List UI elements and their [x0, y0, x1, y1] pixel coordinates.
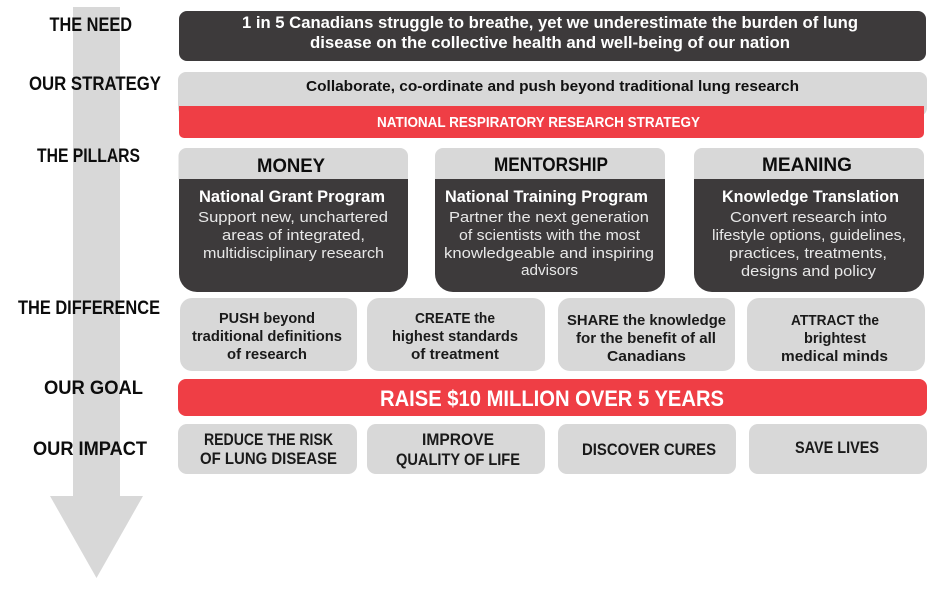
card: reduce the risk [178, 424, 357, 474]
card: share: SHARE the knowledge [567, 312, 726, 329]
card: reduce the risk: REDUCE THE RISK [204, 431, 333, 449]
card: create [367, 298, 545, 371]
panel: pillar money: multidisciplinary research [203, 245, 384, 262]
card: attract: brightest [804, 330, 866, 347]
panel: pillar money: National Grant Program [199, 188, 385, 206]
panel: our strategy: NATIONAL RESPIRATORY RESEARCH STRATEGY [377, 114, 700, 131]
card: attract: ATTRACT the [791, 312, 879, 329]
label: our strategy: OUR STRATEGY [29, 73, 161, 95]
card: reduce the risk: OF LUNG DISEASE [200, 450, 337, 468]
card: improve quality of life [367, 424, 545, 474]
card: create: CREATE the [415, 310, 495, 327]
card: discover cures [558, 424, 736, 474]
panel: pillar money: Support new, unchartered [198, 209, 388, 226]
label: our goal: OUR GOAL [44, 377, 143, 399]
card: create: highest standards [392, 328, 518, 345]
panel: pillar meaning: Knowledge Translation [722, 188, 899, 206]
label: the pillars: THE PILLARS [37, 145, 140, 167]
card: share: for the benefit of all [576, 330, 716, 347]
panel: pillar mentorship: National Training Program [445, 188, 648, 206]
panel: pillar mentorship: knowledgeable and inspiring [444, 245, 654, 262]
panel: pillar money [178, 148, 408, 292]
card: push: PUSH beyond [219, 310, 315, 327]
panel: pillar meaning: MEANING [762, 154, 852, 176]
banner: our goal [178, 379, 927, 416]
label: the difference: THE DIFFERENCE [18, 297, 160, 319]
banner: our goal: RAISE $10 MILLION OVER 5 YEARS [380, 386, 724, 411]
card: attract [747, 298, 925, 371]
card: push: traditional definitions [192, 328, 342, 345]
panel: pillar meaning: Convert research into [730, 209, 887, 226]
card: discover cures: DISCOVER CURES [582, 441, 716, 459]
panel: pillar mentorship [435, 148, 665, 292]
panel: pillar meaning: lifestyle options, guidelines, [712, 227, 906, 244]
card: push: of research [227, 346, 307, 363]
panel: the need: disease on the collective health and well-being of our nation [310, 34, 790, 52]
panel: pillar meaning: practices, treatments, [729, 245, 887, 262]
panel: the need [179, 11, 926, 61]
panel: pillar money: areas of integrated, [222, 227, 365, 244]
panel: our strategy: Collaborate, co-ordinate and push beyond traditional lung research [306, 78, 799, 95]
panel: pillar mentorship: of scientists with the most [459, 227, 641, 244]
card: push [180, 298, 357, 371]
card: share: Canadians [607, 348, 686, 365]
card: save lives [749, 424, 927, 474]
card: improve quality of life: QUALITY OF LIFE [396, 451, 520, 469]
arrow: downward flow [50, 7, 143, 578]
label: our impact: OUR IMPACT [33, 438, 147, 460]
card: improve quality of life: IMPROVE [422, 431, 494, 449]
panel: the need: 1 in 5 Canadians struggle to breathe, yet we underestimate the burden of lung [242, 14, 858, 32]
card: attract: medical minds [781, 348, 888, 365]
card: create: of treatment [411, 346, 499, 363]
panel: pillar mentorship: Partner the next generation [449, 209, 649, 226]
panel: pillar meaning [694, 148, 924, 292]
panel: pillar meaning: designs and policy [741, 263, 877, 280]
panel: pillar mentorship: MENTORSHIP [494, 154, 608, 176]
label: the need: THE NEED [50, 14, 132, 36]
panel: our strategy [178, 72, 927, 138]
panel: pillar mentorship: advisors [521, 262, 578, 279]
panel: pillar money: MONEY [257, 155, 325, 177]
card: save lives: SAVE LIVES [795, 439, 879, 457]
card: share [558, 298, 735, 371]
